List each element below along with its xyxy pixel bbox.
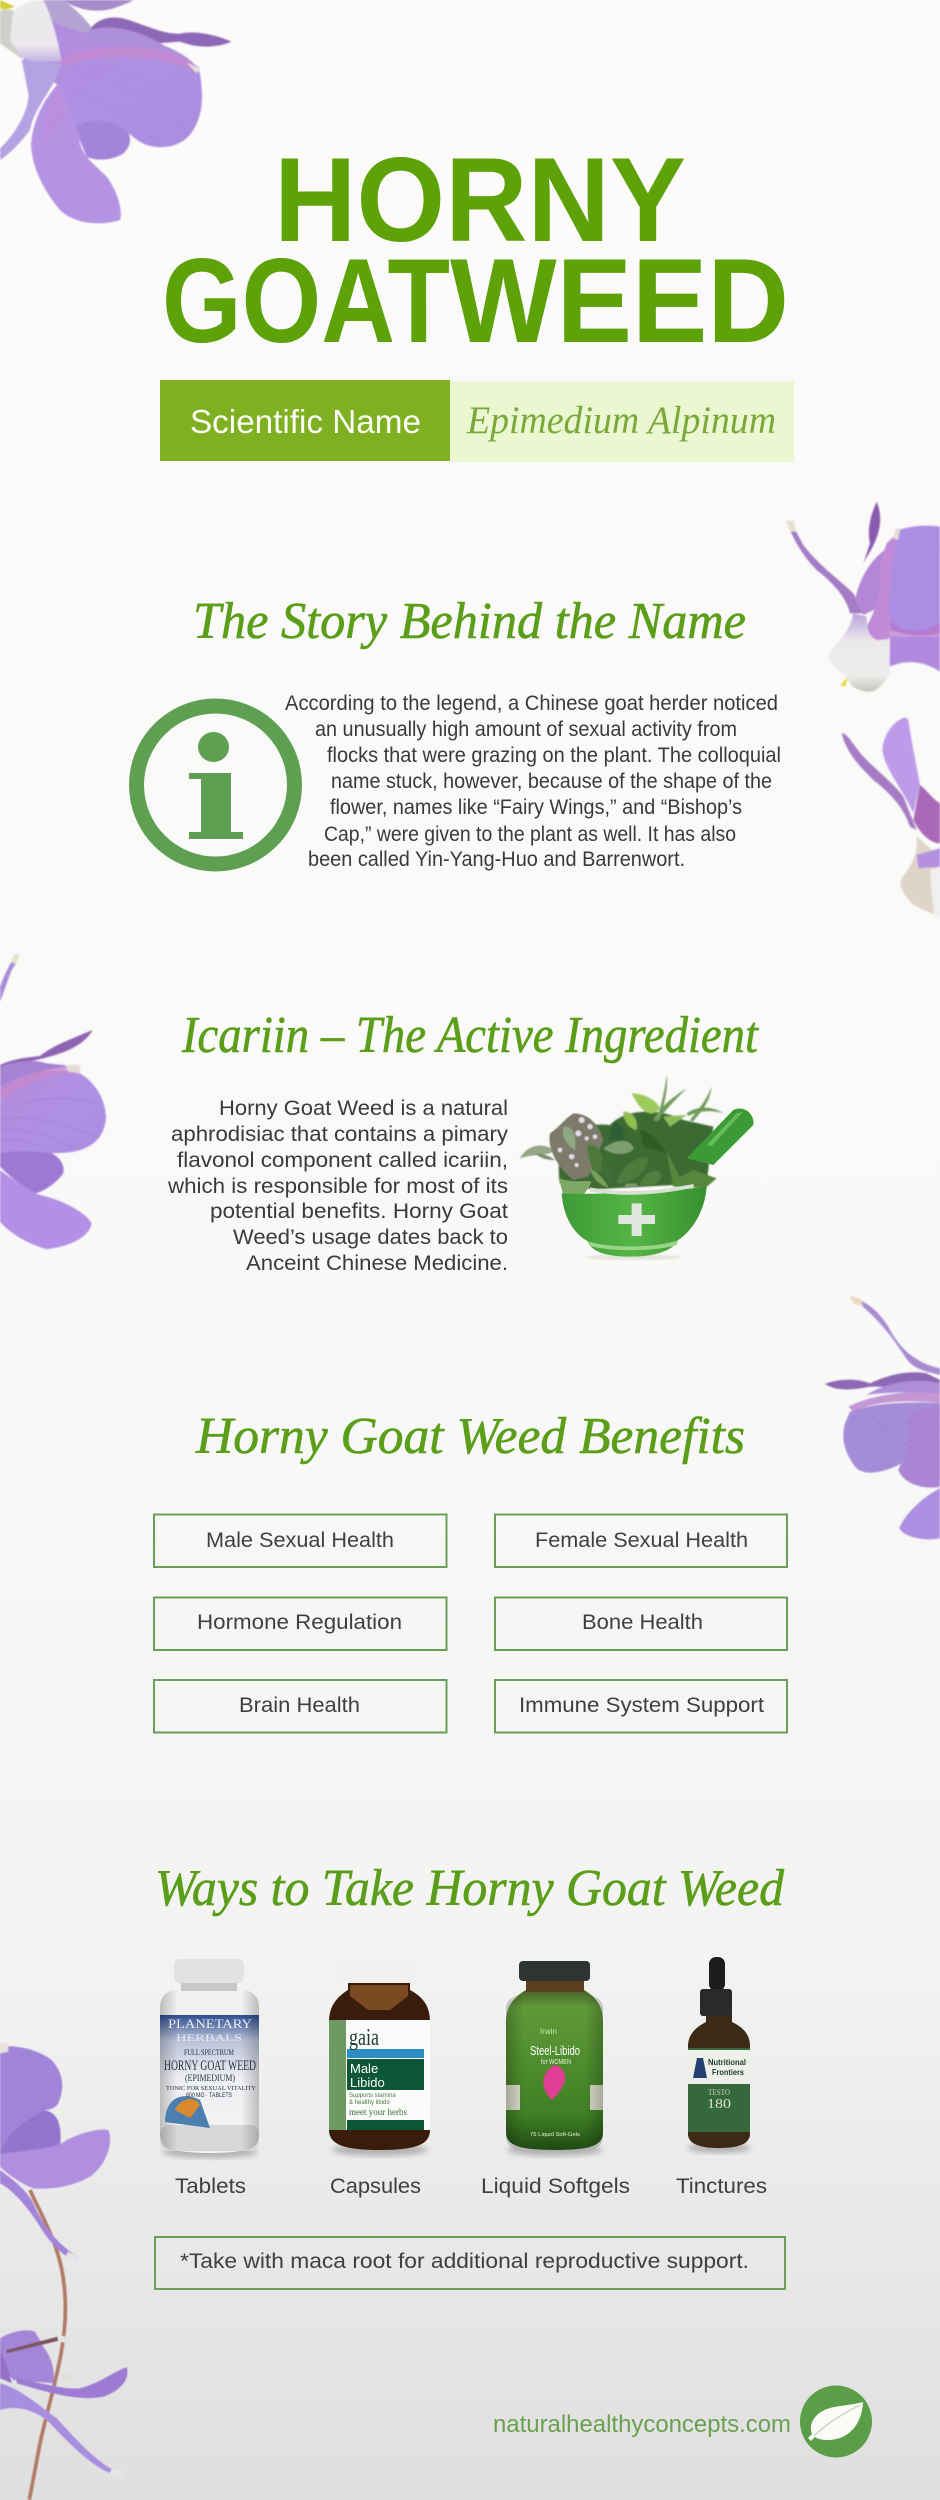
benefit: bone health [495, 1598, 787, 1650]
bottle: tablets: (EPIMEDIUM) [185, 2073, 235, 2083]
heading: benefits: Horny Goat Weed Benefits [195, 1408, 745, 1465]
bottle: tablets: 600 MG · TABLETS [186, 2093, 232, 2099]
bottle: tablets: TONIC FOR SEXUAL VITALITY [166, 2086, 257, 2092]
labels: forms: Liquid Softgels [481, 2175, 630, 2198]
title: GOAT [162, 234, 450, 368]
text: story: flower, names like “Fairy Wings,” and “Bishop’s [330, 796, 742, 819]
bottle: liquid softgels: for WOMEN [541, 2059, 571, 2066]
scientific name banner [160, 380, 794, 462]
title: WEED [450, 234, 789, 368]
bottle: liquid softgels: Irwin [540, 2027, 557, 2036]
benefit: female sexual health [495, 1514, 787, 1567]
bottle: capsules: Supports stamina [349, 2093, 396, 2099]
bottle: tincture: TESTO [708, 2088, 730, 2097]
flower: right lower [825, 1296, 940, 1539]
bottle: tablets: HORNY GOAT WEED [164, 2058, 256, 2074]
flower: bottom left with stem [0, 2043, 127, 2500]
flower: right second [842, 733, 917, 830]
text: icariin: flavonol component called icariin, [177, 1149, 508, 1172]
footer: website and logo: naturalhealthyconcepts.com [493, 2411, 791, 2438]
image: mortar with herbs [520, 1075, 753, 1260]
labels: forms: Capsules [330, 2175, 421, 2198]
bottle: capsules [329, 1961, 430, 2156]
callout: maca root [155, 2237, 785, 2289]
benefit: bone health: Bone Health [582, 1611, 703, 1634]
text: icariin: Anceint Chinese Medicine. [246, 1252, 508, 1275]
benefits grid [154, 1514, 787, 1732]
benefit: hormone regulation: Hormone Regulation [197, 1611, 402, 1634]
bottle: capsules: Male [350, 2061, 378, 2076]
bottle: liquid softgels: Steel-Libido [530, 2043, 580, 2058]
bottle: tablets [160, 1959, 259, 2158]
benefit: female sexual health: Female Sexual Health [535, 1529, 748, 1552]
labels: forms: Tablets [175, 2175, 246, 2198]
text: icariin: potential benefits. Horny Goat [210, 1200, 508, 1223]
bottle: liquid softgels [506, 1961, 603, 2156]
text: icariin: aphrodisiac that contains a pimary [171, 1123, 509, 1146]
icon: info [136, 706, 294, 864]
benefit: brain health [154, 1680, 446, 1732]
bottle: tincture [687, 1957, 751, 2153]
benefit: male sexual health: Male Sexual Health [206, 1529, 394, 1552]
text: story: Cap,” were given to the plant as well. It has also [324, 823, 736, 846]
flower: top left [0, 0, 232, 223]
icon: leaf logo [800, 2386, 872, 2458]
bottle: tincture: Frontiers [712, 2068, 745, 2077]
benefit: immune system support [495, 1680, 787, 1732]
bottle: capsules: Libido [350, 2075, 385, 2090]
text: icariin [167, 1097, 509, 1275]
bottle: tincture: Nutritional [708, 2058, 746, 2067]
bottle: tablets: FULL SPECTRUM [184, 2048, 234, 2057]
scientific name banner: Epimedium Alpinum [466, 399, 776, 442]
benefit: immune system support: Immune System Support [519, 1694, 764, 1717]
bottle: tablets: HERBALS [176, 2033, 242, 2043]
bottle: capsules: meet your herbs [349, 2107, 407, 2117]
text: story: name stuck, however, because of the shape of the [331, 770, 772, 793]
bottle: capsules: gaia [349, 2025, 379, 2051]
text: icariin: which is responsible for most of its [167, 1175, 508, 1198]
text: icariin: Horny Goat Weed is a natural [219, 1097, 508, 1120]
heading: story: The Story Behind the Name [193, 593, 746, 650]
text: story: flocks that were grazing on the plant. The colloquial [327, 744, 781, 767]
benefit: hormone regulation [154, 1598, 446, 1650]
title: HORNY [274, 133, 686, 267]
benefit: brain health: Brain Health [239, 1694, 360, 1717]
bottle: tincture: 180 [707, 2097, 731, 2112]
labels: forms [175, 2175, 767, 2198]
bottle: tablets: PLANETARY [168, 2016, 253, 2031]
text: story: an unusually high amount of sexual activity from [315, 718, 737, 741]
footer: website and logo [493, 2386, 872, 2458]
flower: upper right [786, 502, 940, 917]
text: story: been called Yin-Yang-Huo and Barrenwort. [308, 848, 685, 871]
text: story: According to the legend, a Chinese goat herder noticed [285, 692, 778, 715]
text: icariin: Weed’s usage dates back to [233, 1226, 508, 1249]
title [162, 133, 789, 368]
scientific name banner: Scientific Name [190, 403, 421, 440]
heading: icariin: Icariin – The Active Ingredient [181, 1007, 759, 1064]
text: story [285, 692, 781, 871]
bottle: liquid softgels: 75 Liquid Soft-Gels [530, 2132, 581, 2138]
bottle: capsules: & healthy libido [349, 2100, 390, 2106]
labels: forms: Tinctures [676, 2175, 767, 2198]
flower: left middle [0, 954, 106, 1249]
heading: ways: Ways to Take Horny Goat Weed [155, 1860, 785, 1917]
callout: maca root: *Take with maca root for additional reproductive support. [180, 2250, 749, 2273]
benefit: male sexual health [154, 1514, 446, 1567]
